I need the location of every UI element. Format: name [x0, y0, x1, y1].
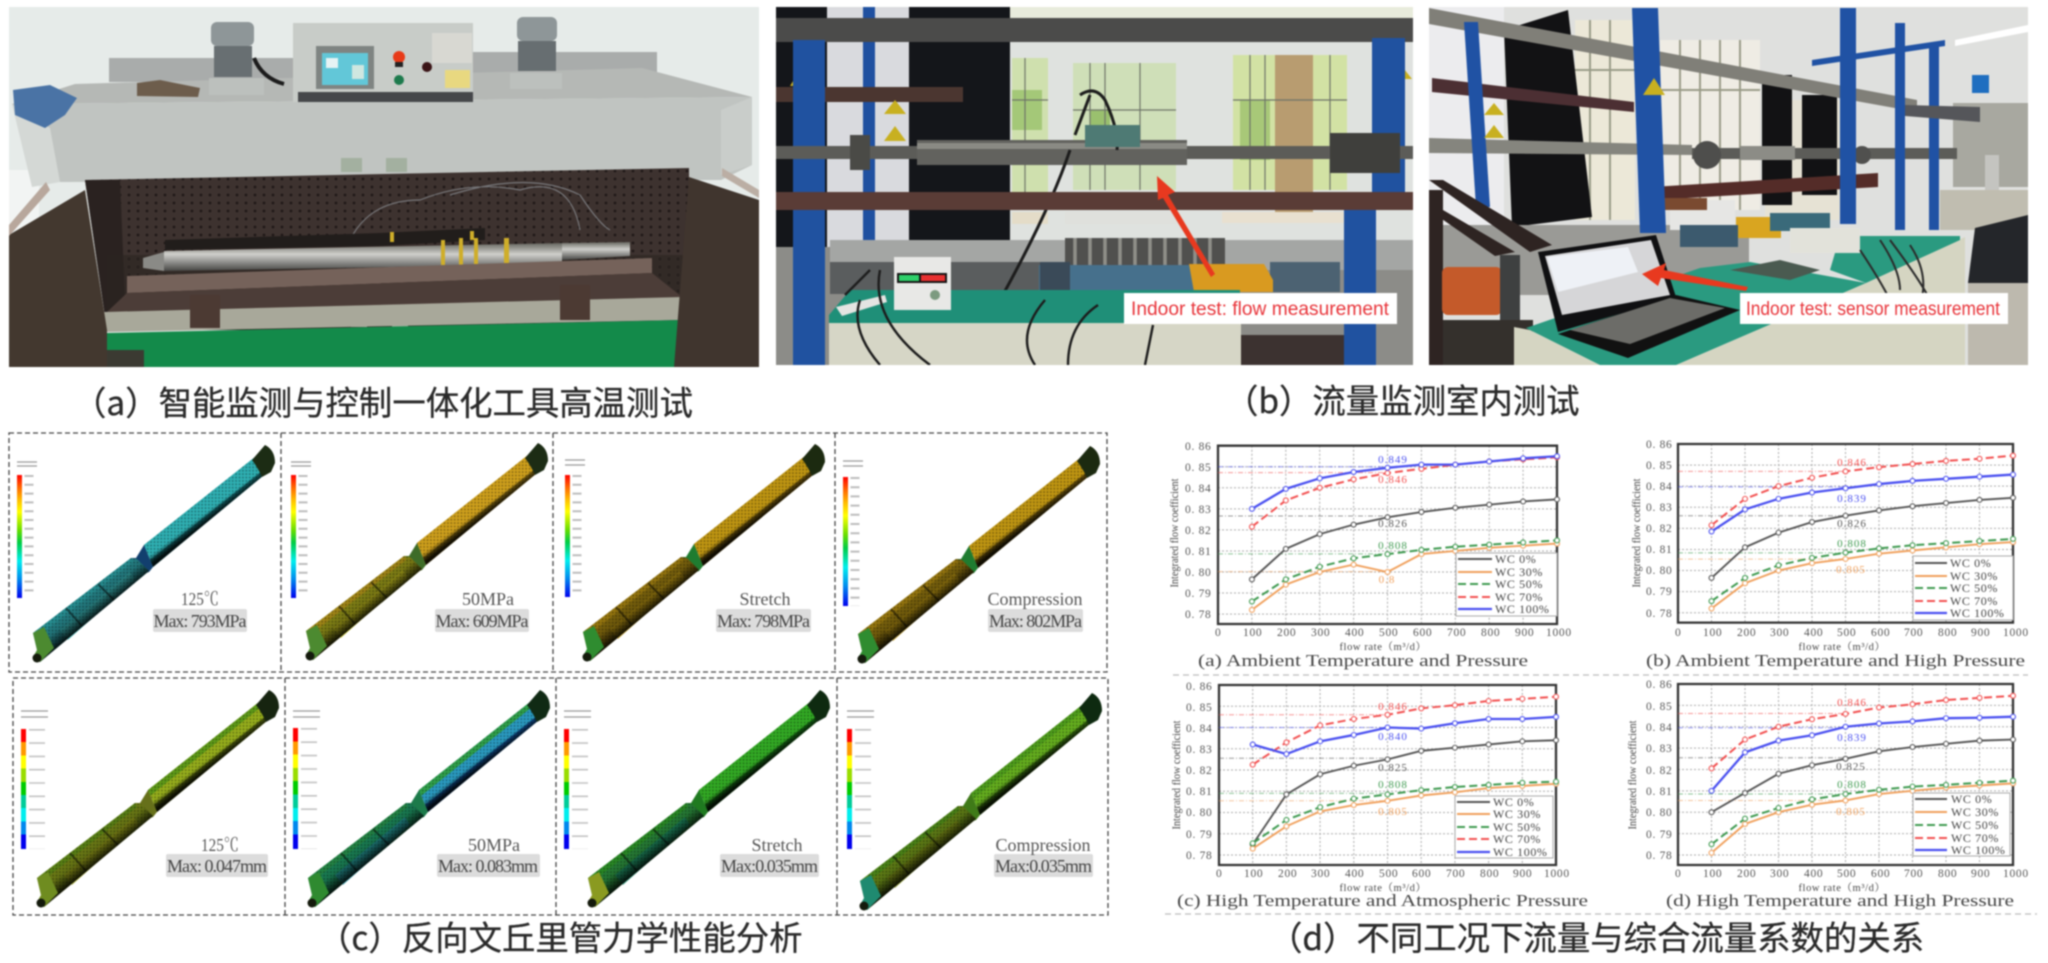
ticks a: 800: [1481, 627, 1500, 639]
deformation labels: 50MPa: [468, 835, 520, 855]
warning signs: [790, 70, 1412, 142]
stress labels: Max: 802MPa: [989, 611, 1082, 631]
window frame: [1010, 40, 1414, 240]
subtitle b: (b) Ambient Temperature and High Pressure: [1646, 651, 2025, 670]
upper right lamp and valve: [1905, 25, 2028, 122]
label text: Indoor test: sensor measurement: [1746, 299, 2001, 320]
ticks b: 1000: [2003, 627, 2029, 639]
value labels d: 0.839: [1837, 732, 1867, 744]
chart b: ambient temperature and high pressure: [1631, 439, 2029, 670]
chart d: high temperature and high pressure: [1627, 679, 2029, 910]
ticks d: 0. 78: [1646, 850, 1672, 862]
legend b: WC 100%: [1950, 606, 2005, 620]
stress labels: [153, 589, 1083, 632]
ticks a: 0. 83: [1185, 504, 1212, 516]
window bands: [1575, 20, 1845, 220]
axis titles a: Integrated flow coefficient: [1169, 478, 1181, 588]
value labels d: [1836, 697, 1867, 818]
rear duct: [109, 52, 657, 82]
ticks b: 900: [1971, 627, 1990, 639]
deformation labels: Compression: [995, 835, 1091, 855]
caption b: （b）流量监测室内测试: [1225, 374, 1580, 423]
floor: [1968, 283, 2029, 365]
value labels a: [1378, 454, 1408, 586]
axis titles c: Integrated flow coefficient: [1171, 720, 1183, 830]
ticks d: 700: [1904, 868, 1923, 880]
legend b: WC 50%: [1950, 581, 1998, 595]
value labels c: 0.846: [1378, 701, 1408, 713]
stress labels: 50MPa: [462, 589, 514, 609]
test pipe: [1429, 138, 1957, 169]
ticks b: 0. 86: [1646, 439, 1672, 451]
ticks b: 300: [1770, 627, 1789, 639]
ticks d: 0. 84: [1646, 722, 1672, 734]
cabinets: [1676, 237, 1965, 365]
power strip and cables: [836, 270, 1153, 365]
ticks b: 0. 78: [1646, 608, 1672, 620]
ticks c: [1186, 681, 1570, 880]
legend b: WC 0%: [1950, 556, 1991, 570]
red arrow: [1642, 263, 1748, 291]
panel c: stress results: [9, 433, 1107, 672]
ticks d: 0: [1675, 868, 1681, 880]
ticks d: 0. 85: [1646, 701, 1672, 713]
clips: [341, 158, 408, 327]
legend a: WC 50%: [1495, 577, 1543, 591]
ticks d: 0. 83: [1646, 743, 1672, 755]
panel c: deformation results: [13, 678, 1108, 915]
value labels c: 0.825: [1378, 762, 1408, 774]
ticks a: 0. 79: [1185, 588, 1212, 600]
brown beam 2: [1652, 173, 1878, 210]
ticks a: 0. 80: [1185, 567, 1212, 579]
ticks d: 800: [1938, 868, 1957, 880]
stress frame: [9, 433, 1107, 672]
upper tool: [165, 228, 485, 250]
axis titles a: [1169, 478, 1427, 653]
pump: [1680, 213, 1830, 247]
ticks b: 0: [1675, 627, 1681, 639]
ticks c: 500: [1379, 868, 1398, 880]
blue posts: [793, 38, 1405, 365]
legend b: WC 70%: [1950, 594, 1998, 608]
legend d: WC 0%: [1951, 792, 1992, 806]
chart a: ambient temperature and pressure: [1169, 441, 1572, 670]
ticks c: 0. 80: [1186, 807, 1212, 819]
legend c: WC 100%: [1493, 845, 1548, 859]
ticks a: 700: [1447, 627, 1466, 639]
ticks a: 100: [1243, 627, 1262, 639]
ticks c: 0. 78: [1186, 850, 1212, 862]
green floor: [95, 320, 721, 367]
value labels c: [1378, 701, 1408, 818]
deformation labels: 125℃: [201, 835, 239, 855]
ticks c: 800: [1480, 868, 1499, 880]
ticks c: 0. 83: [1186, 744, 1212, 756]
blue posts: [1464, 8, 1945, 233]
legend a: WC 100%: [1495, 602, 1550, 616]
wires: [350, 182, 610, 240]
legend d: WC 70%: [1951, 831, 1999, 845]
value labels d: 0.825: [1836, 761, 1866, 773]
deformation 50MPa tool: [308, 690, 550, 908]
ticks a: 900: [1515, 627, 1534, 639]
ticks c: 700: [1446, 868, 1465, 880]
ticks c: 0. 85: [1186, 702, 1212, 714]
ticks d: 0. 82: [1646, 765, 1672, 777]
ticks b: 0. 84: [1646, 481, 1672, 493]
panel b photo: flow indoor test: [776, 7, 1414, 365]
deformation labels: Max: 0.047mm: [167, 856, 267, 876]
subtitle c: (c) High Temperature and Atmospheric Pressure: [1177, 891, 1588, 910]
value labels a: 0.826: [1378, 518, 1408, 530]
deformation labels: Max: 0.083mm: [438, 856, 538, 876]
deformation labels: Max:0.035mm: [995, 856, 1092, 876]
subtitle d: (d) High Temperature and High Pressure: [1666, 891, 2014, 910]
subtitle a: (a) Ambient Temperature and Pressure: [1198, 651, 1528, 670]
caption a: （a）智能监测与控制一体化工具高温测试: [73, 376, 693, 425]
value labels b: [1836, 457, 1867, 576]
legend c: WC 50%: [1493, 820, 1541, 834]
value labels c: 0.840: [1378, 731, 1408, 743]
legend d: [1913, 792, 2010, 857]
ticks d: 500: [1837, 868, 1856, 880]
stress labels: Compression: [987, 589, 1083, 609]
label text: Indoor test: flow measurement: [1131, 299, 1390, 320]
plot d: [1678, 684, 2013, 865]
legend a: WC 30%: [1495, 565, 1543, 579]
brown beam lower: [776, 192, 1413, 210]
ticks b: 0. 82: [1646, 523, 1672, 535]
legend a: [1456, 552, 1557, 616]
ticks c: 0. 82: [1186, 765, 1212, 777]
plot b: [1678, 444, 2013, 623]
ticks c: 0. 86: [1186, 681, 1212, 693]
lower frame: [104, 296, 680, 333]
ticks a: 200: [1277, 627, 1296, 639]
deformation labels: Max:0.035mm: [721, 856, 818, 876]
black frame diagonals: [1429, 180, 1552, 365]
stress legends: [17, 460, 863, 606]
ticks b: 0. 83: [1646, 502, 1672, 514]
ticks d: 0. 80: [1646, 807, 1672, 819]
ticks b: 800: [1938, 627, 1957, 639]
ticks a: 500: [1379, 627, 1398, 639]
ticks a: 1000: [1546, 627, 1572, 639]
motor: [1039, 262, 1340, 292]
stress labels: Max: 798MPa: [717, 611, 810, 631]
axis titles d: flow rate（m³/d）: [1798, 882, 1886, 894]
ticks d: 0. 86: [1646, 679, 1672, 691]
laptop: [1538, 235, 1740, 358]
black curtains: [1504, 10, 1837, 227]
ticks a: 0: [1215, 627, 1221, 639]
top pipe: [1429, 8, 1917, 112]
bench: [829, 290, 1344, 365]
legend d: WC 30%: [1951, 805, 1999, 819]
ticks b: 0. 80: [1646, 565, 1672, 577]
ticks d: [1646, 679, 2029, 880]
value labels a: 0.8: [1379, 574, 1395, 586]
legend c: [1455, 795, 1553, 859]
plot a: [1218, 446, 1557, 624]
legend b: [1913, 556, 2013, 620]
legend b: WC 30%: [1950, 569, 1998, 583]
axis titles c: flow rate（m³/d）: [1339, 882, 1427, 894]
legend c: WC 30%: [1493, 807, 1541, 821]
oven interior: [85, 168, 689, 330]
ticks b: 500: [1837, 627, 1856, 639]
chart c: high temperature and atmospheric pressure: [1171, 681, 1588, 910]
ticks a: 0. 81: [1185, 546, 1212, 558]
axis titles b: flow rate（m³/d）: [1798, 641, 1886, 653]
bench clutter: [1730, 260, 1820, 280]
value labels c: 0.805: [1378, 806, 1408, 818]
ticks a: 0. 84: [1185, 483, 1212, 495]
axis titles d: [1627, 720, 1886, 894]
ticks b: 200: [1737, 627, 1756, 639]
ticks c: 900: [1513, 868, 1532, 880]
value labels d: 0.808: [1837, 779, 1867, 791]
value labels b: 0.808: [1837, 538, 1867, 550]
top pipe: [776, 18, 1413, 42]
ticks c: 0: [1216, 868, 1222, 880]
ticks b: 100: [1703, 627, 1722, 639]
ticks c: 100: [1244, 868, 1263, 880]
ticks a: [1185, 441, 1572, 639]
ticks a: 0. 82: [1185, 525, 1212, 537]
stress labels: 125℃: [181, 589, 219, 609]
ticks a: 0. 78: [1185, 609, 1212, 621]
value labels c: 0.808: [1378, 779, 1408, 791]
value labels b: 0.846: [1837, 457, 1867, 469]
ticks b: 0. 81: [1646, 544, 1672, 556]
legend a: WC 70%: [1495, 590, 1543, 604]
power supply: [894, 257, 951, 310]
ticks c: 0. 79: [1186, 829, 1212, 841]
ticks c: 300: [1311, 868, 1330, 880]
oven top surface: [12, 68, 752, 104]
stress labels: Max: 793MPa: [154, 611, 246, 631]
ticks d: 100: [1703, 868, 1722, 880]
stress 50MPa tool: [306, 443, 548, 660]
value labels a: 0.808: [1378, 540, 1408, 552]
ticks a: 400: [1345, 627, 1364, 639]
panel a photo: high temperature test oven: [9, 7, 759, 367]
ticks b: 0. 85: [1646, 460, 1672, 472]
ticks d: 600: [1871, 868, 1890, 880]
stress 125C tool: [32, 445, 275, 662]
ticks b: 600: [1871, 627, 1890, 639]
caption c: （c）反向文丘里管力学性能分析: [318, 911, 802, 960]
ticks c: 1000: [1544, 868, 1570, 880]
motor left: [209, 22, 284, 95]
motor right: [516, 16, 558, 72]
ticks c: 400: [1345, 868, 1364, 880]
stress stretch tool: [582, 444, 825, 662]
plot c: [1219, 685, 1556, 865]
ticks d: 300: [1770, 868, 1789, 880]
axis titles d: Integrated flow coefficient: [1627, 720, 1639, 830]
wall lower: [830, 240, 1414, 270]
warning signs: [1484, 78, 1665, 138]
ticks d: 900: [1971, 868, 1990, 880]
deformation stretch tool: [588, 690, 830, 908]
axis titles b: [1631, 478, 1886, 653]
value labels a: 0.849: [1378, 454, 1408, 466]
control box: [293, 23, 473, 102]
stress labels: Stretch: [740, 589, 790, 609]
main tool: [143, 238, 630, 271]
orange tank: [1442, 255, 1520, 325]
stress labels: Max: 609MPa: [436, 611, 528, 631]
white label: [1124, 293, 1397, 324]
brown beam upper: [776, 87, 963, 102]
legend a: WC 0%: [1495, 552, 1536, 566]
ticks c: 600: [1412, 868, 1431, 880]
yellow pump: [1189, 264, 1273, 292]
ticks a: 300: [1311, 627, 1330, 639]
value labels a: 0.846: [1378, 474, 1408, 486]
red arrow: [1157, 176, 1215, 277]
axis titles c: [1171, 720, 1427, 894]
ticks a: 0. 85: [1185, 462, 1212, 474]
stress compression tool: [858, 446, 1100, 664]
ticks a: 0. 86: [1185, 441, 1212, 453]
legend c: WC 70%: [1493, 832, 1541, 846]
axis titles a: flow rate（m³/d）: [1339, 641, 1427, 653]
deformation compression tool: [860, 693, 1102, 910]
legend d: WC 100%: [1951, 843, 2006, 857]
legend c: WC 0%: [1493, 795, 1534, 809]
brown beam 1: [1432, 78, 1634, 112]
ticks d: 0. 81: [1646, 786, 1672, 798]
ticks c: 200: [1278, 868, 1297, 880]
right door: [674, 177, 759, 367]
value labels b: 0.839: [1837, 493, 1867, 505]
ticks d: 0. 79: [1646, 829, 1672, 841]
lower wall: [1429, 225, 1749, 295]
platform: [127, 258, 652, 293]
ticks a: 600: [1413, 627, 1432, 639]
ticks c: 0. 81: [1186, 786, 1212, 798]
value labels d: 0.805: [1836, 806, 1866, 818]
panel b photo: sensor indoor test: [1429, 7, 2029, 365]
deformation labels: Stretch: [752, 835, 802, 855]
bench surface: [1526, 228, 1960, 365]
value labels b: 0.805: [1836, 564, 1866, 576]
ticks b: 0. 79: [1646, 586, 1672, 598]
ticks b: 400: [1804, 627, 1823, 639]
cable: [1000, 91, 1117, 300]
rag brown: [137, 80, 200, 97]
value labels d: 0.846: [1837, 697, 1867, 709]
axis titles b: Integrated flow coefficient: [1631, 478, 1643, 588]
tank: [1940, 103, 2029, 235]
radiator: [1065, 238, 1225, 270]
white label: [1740, 293, 2008, 324]
deformation legends: [21, 711, 874, 849]
ticks d: 200: [1737, 868, 1756, 880]
blue rag: [13, 85, 77, 128]
deformation frame: [13, 678, 1108, 915]
ticks b: 700: [1904, 627, 1923, 639]
deformation labels: [166, 835, 1093, 877]
value labels b: 0.826: [1837, 518, 1867, 530]
ticks d: 1000: [2003, 868, 2029, 880]
oven front hood: [12, 97, 752, 187]
ticks d: 400: [1804, 868, 1823, 880]
ticks c: 0. 84: [1186, 723, 1212, 735]
caption d: （d）不同工况下流量与综合流量系数的关系: [1269, 911, 1924, 960]
ticks b: [1646, 439, 2029, 639]
left door: [9, 190, 107, 367]
legend d: WC 50%: [1951, 818, 1999, 832]
test pipe: [776, 133, 1413, 173]
deformation 125C tool: [36, 690, 279, 908]
